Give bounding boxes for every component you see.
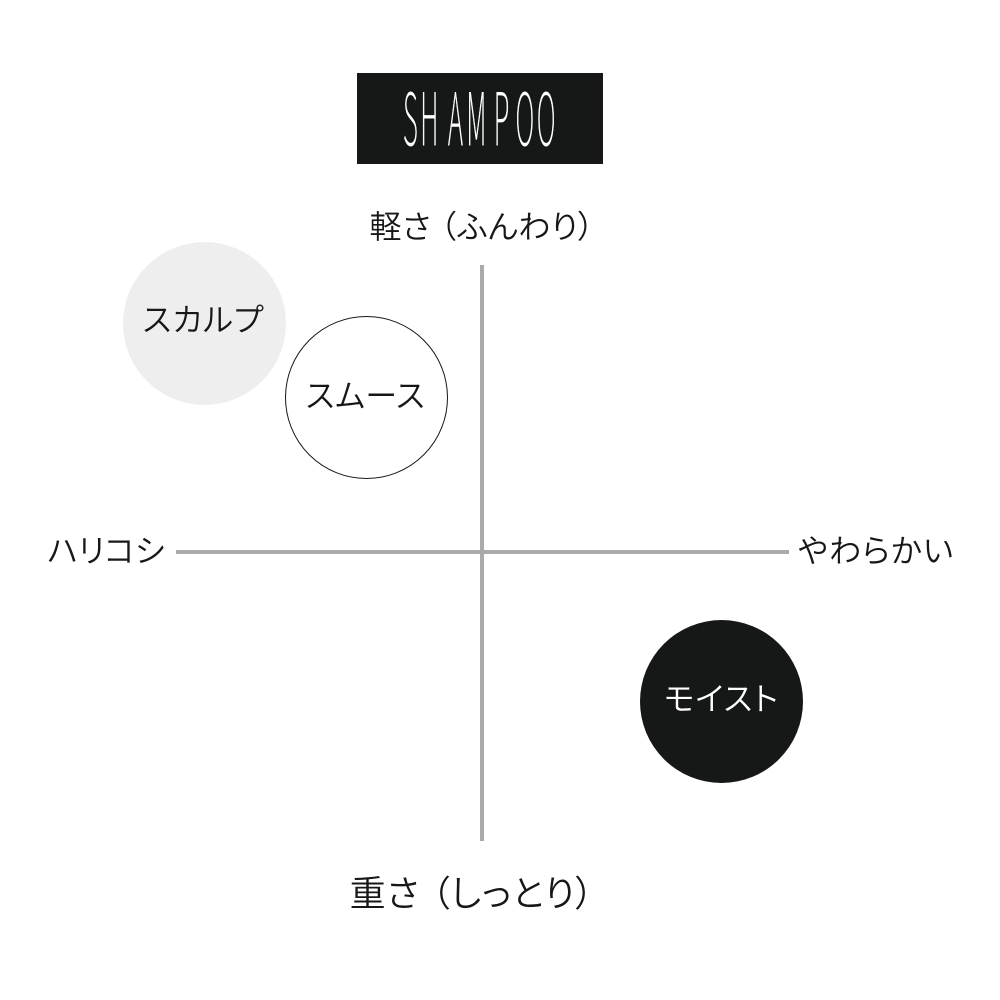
bottom axis label: 重さ （しっとり） <box>350 873 594 914</box>
top axis label: 軽さ （ふんわり） <box>369 209 595 245</box>
vertical axis <box>480 265 484 841</box>
left axis label: ハリコシ <box>48 533 164 569</box>
bubble: smooth <box>285 316 448 479</box>
bubble label: smooth: スムース <box>306 378 425 414</box>
bubble: moist <box>640 620 803 783</box>
bubble: scalp <box>123 242 286 405</box>
title banner <box>357 73 603 164</box>
horizontal axis <box>176 550 789 554</box>
bubble label: moist: モイスト <box>664 681 779 717</box>
bubble label: scalp: スカルプ <box>143 302 264 338</box>
right axis label: やわらかい <box>798 533 954 569</box>
